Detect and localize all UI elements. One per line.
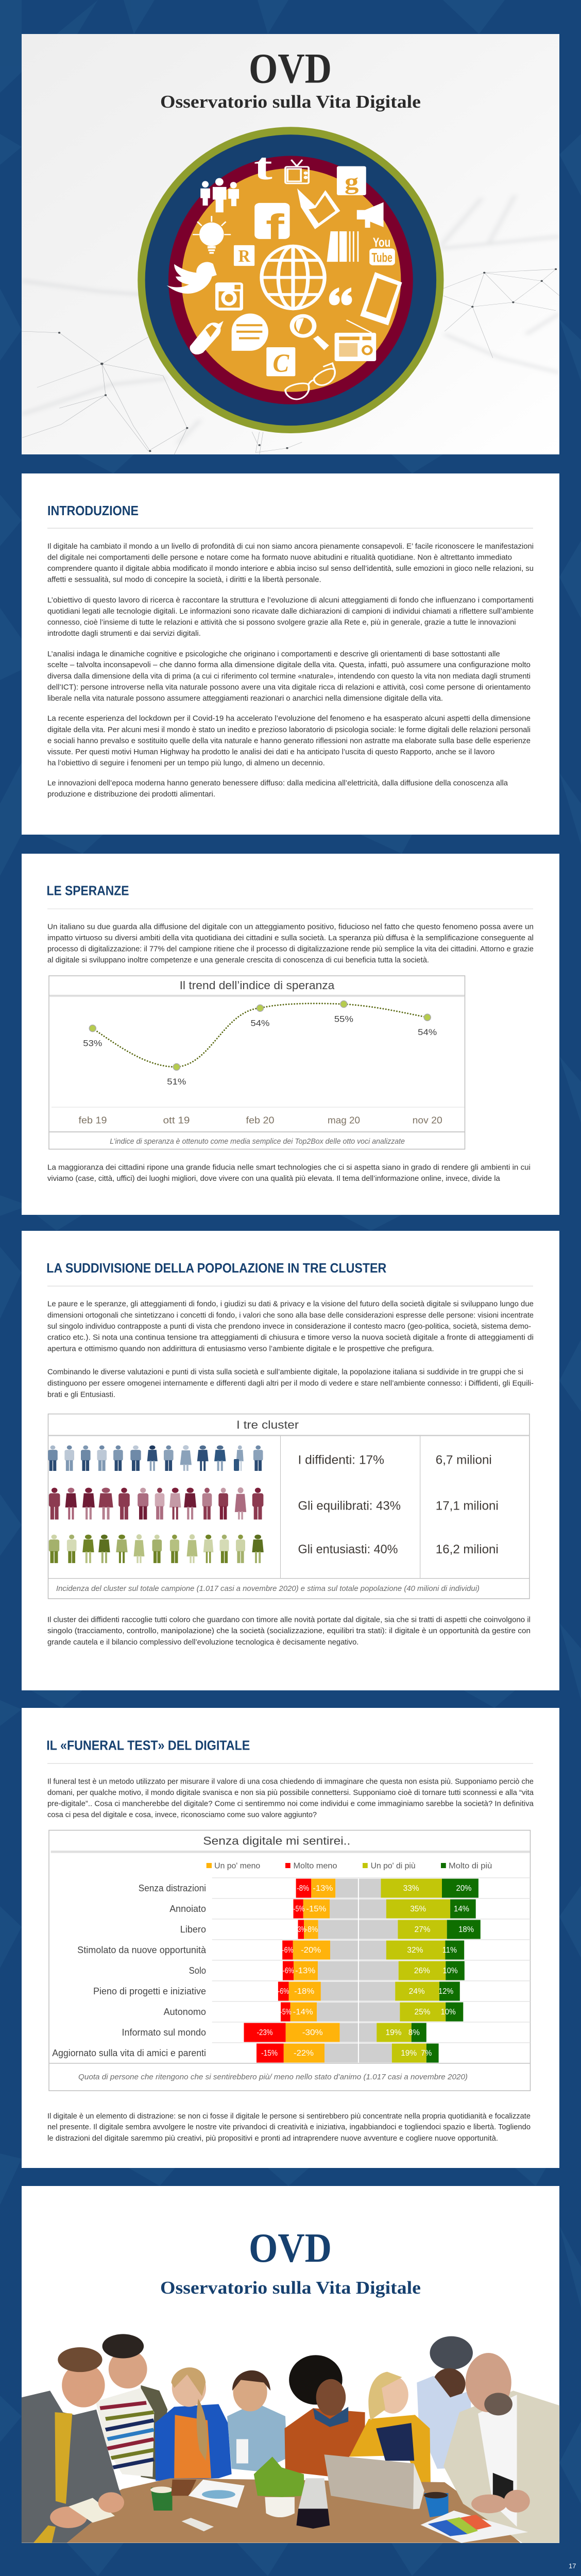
text: introduzione body: e sociali hanno prevalso e sostituito quelle della vita naturale e hanno generato riflessioni non astratte ma elaborate sulla base delle esperienze xyxy=(47,737,531,745)
closing subtitle: Osservatorio sulla Vita Digitale xyxy=(160,2278,421,2298)
pictogram: diffidenti people xyxy=(48,1445,263,1471)
row: aggiornato: -15% xyxy=(261,2049,278,2058)
row: equilibrati: 17,1 milioni xyxy=(436,1499,499,1513)
row: libero xyxy=(180,1920,481,1939)
person: woman in blue cardigan xyxy=(155,2367,232,2481)
text: funeral intro: Il funeral test è un metodo utilizzato per misurare il valore di una cosa chiedendo di immaginare che questa non esista più. Supponiamo perciò che xyxy=(47,1777,534,1786)
x axis labels: nov 20 xyxy=(413,1115,442,1125)
icon: megaphone xyxy=(357,202,384,228)
text: introduzione body: scelte – talvolta inconsapevoli – che danno forma alla dimensione digitale della vita. Questa, infatti, può assumere una configurazione molto xyxy=(47,661,531,669)
icon: c letter: C xyxy=(272,349,289,378)
row: informato sul mondo: 8% xyxy=(408,2028,420,2037)
text: introduzione body: del digitale nei comportamenti delle persone e notare come ha formato nuove abitudini e ritualità quotidiane. Non è altrettanto immediato xyxy=(47,553,512,562)
row: aggiornato: 7% xyxy=(421,2049,432,2058)
row: libero: Libero xyxy=(180,1924,206,1935)
text: introduzione body: affetti e sessualità, sul modo di concepire la società, i diritti e la libertà personale. xyxy=(47,576,321,584)
icon: folder xyxy=(297,189,340,229)
text: cluster intro xyxy=(47,1300,534,1399)
row: senza distrazioni xyxy=(139,1878,479,1898)
icon: tumblr: t xyxy=(254,146,272,188)
icon: people xyxy=(200,178,239,212)
icon: old phone xyxy=(190,321,224,354)
panel: closing xyxy=(22,2186,559,2543)
network background xyxy=(22,195,559,454)
panel: tre cluster xyxy=(22,1231,559,1690)
row: diffidenti: 6,7 milioni xyxy=(436,1453,492,1467)
text: introduzione body: diversa dalla dimensione della vita di prima (a cui ci riferimento col termine «naturale», intendendo con questo la vita non mediata dagli strumenti xyxy=(47,672,531,681)
beaker xyxy=(297,2478,330,2529)
legend: Molto di più xyxy=(449,1862,492,1871)
text: cluster intro: apertura e ottimismo quando non addirittura di entusiasmo verso l’ambiente digitale e le prospettive che prefigura. xyxy=(47,1345,434,1353)
text: introduzione body: Le innovazioni dell’epoca moderna hanno generato benessere diffuso: dalla medicina all’elettricità, dalla diffusione della conoscenza alla xyxy=(47,779,508,787)
row: annoiato: 35% xyxy=(410,1905,426,1913)
icon: facebook: f xyxy=(266,207,285,248)
chart: trend indice di speranza xyxy=(49,976,465,1149)
row: annoiato xyxy=(169,1899,476,1919)
row: annoiato: -5% xyxy=(293,1905,305,1913)
icon: youtube xyxy=(369,235,395,265)
phone on table xyxy=(182,2518,214,2531)
text: introduzione body: quotidiani legati alle tecnologie digitali. Le informazioni sono ricavate dalle dichiarazioni di campioni di individui chiamati a riflettere sull’ambiente xyxy=(47,607,534,616)
row: solo: Solo xyxy=(189,1965,206,1976)
text: cluster intro: distinguono per essere omogenei internamente e differenti dagli altri per il modo di vedere e stare nell’ambiente connesso: i Diffidenti, gli Equili- xyxy=(47,1379,534,1387)
heading: suddivisione: LA SUDDIVISIONE DELLA POPOLAZIONE IN TRE CLUSTER xyxy=(46,1261,386,1276)
text: introduzione body: vissute. Per questi motivi Human Highway ha prodotto le analisi dei dati e ha anticipato l’uscita di questo Rapporto, anche se il lavoro xyxy=(47,748,494,756)
row: senza distrazioni: -8% xyxy=(297,1884,309,1893)
row: pieno di progetti: 24% xyxy=(409,1987,425,1996)
person: man in stripes xyxy=(96,2334,167,2480)
data labels xyxy=(83,1014,437,1087)
text: cluster closing: grande cautela e il bilancio complessivo dell’evoluzione tecnologica è decisamente negativo. xyxy=(47,1638,358,1647)
icon: tv xyxy=(285,160,309,183)
row: informato sul mondo: Informato sul mondo xyxy=(122,2027,206,2038)
mug: blue xyxy=(424,2492,448,2517)
icon: quote xyxy=(329,287,352,305)
text: cluster closing: Il cluster dei diffidenti raccoglie tutti coloro che guardano con timore alle novità portate dal digitale, sia che si tratti di aspetti che coinvolgono il xyxy=(47,1616,531,1624)
text: funeral intro: domani, per qualche motivo, il mondo digitale svanisca e non sia più possibile connettersi. Supponiamo cioè di tornare tutti sconnessi e alla “vita xyxy=(47,1789,534,1797)
x axis labels: feb 19 xyxy=(78,1115,107,1125)
icon: google xyxy=(337,166,366,195)
row: solo: 26% xyxy=(414,1967,430,1975)
text: introduzione body: produzione e distribuzione dei prodotti alimentari. xyxy=(47,790,215,799)
text: funeral intro: cosa ci pesa del digitale e cosa, invece, riconosciamo come suo valore aggiunto? xyxy=(47,1811,317,1819)
row: senza distrazioni: -13% xyxy=(313,1884,333,1893)
row: annoiato: -15% xyxy=(306,1905,327,1913)
icon: lightbulb xyxy=(193,216,231,254)
row: informato sul mondo xyxy=(122,2023,426,2042)
row: entusiasti xyxy=(298,1543,499,1556)
text: introduzione body: digitale della vita. Per alcuni mesi il mondo è stato un inedito e prezioso laboratorio di psicologia sociale: le forme digitali delle relazioni personali xyxy=(47,726,531,734)
closing title: OVD xyxy=(249,2226,332,2271)
pictogram: equilibrati people xyxy=(49,1487,263,1519)
text: introduzione body: Il digitale ha cambiato il mondo a un livello di profondità di cui non siamo ancora pienamente consapevoli. E’ facile riconoscere le manifestazioni xyxy=(47,543,534,551)
icon: books xyxy=(327,231,358,262)
chart: senza digitale mi sentirei xyxy=(49,1830,531,2091)
chart title: Senza digitale mi sentirei.. xyxy=(203,1835,350,1848)
row: diffidenti xyxy=(298,1453,492,1467)
tablet and paper xyxy=(171,2480,245,2508)
text: funeral closing: le distrazioni del digitale saremmo più creativi, più propositivi e pronti ad intraprendere nuove avventure e cogliere nuove opportunità. xyxy=(47,2134,498,2143)
data points xyxy=(89,1001,431,1071)
person: man with cap xyxy=(417,2336,473,2469)
trend line xyxy=(93,1004,428,1067)
row: informato sul mondo: -30% xyxy=(302,2028,323,2037)
text: cluster intro: cratico etc.). Si nota una continua tensione tra atteggiamenti di chiusura e timore verso la nuova società digitale a fronte di atteggiamenti di xyxy=(47,1334,534,1342)
text: speranze intro: al digitale si sviluppano inoltre competenze e una generale crescita di conoscenza di cui beneficia tutta la società. xyxy=(47,956,429,964)
x axis labels: ott 19 xyxy=(163,1115,190,1125)
icon: smartphone xyxy=(360,272,402,326)
chart caption: Quota di persone che ritengono che si sentirebbero più/ meno nello stato d’animo (1.017 casi a novembre 2020) xyxy=(78,2073,468,2081)
legend xyxy=(207,1862,492,1871)
panel: cover xyxy=(22,34,559,454)
row: autonomo xyxy=(164,2002,463,2022)
row: senza distrazioni: 20% xyxy=(456,1884,472,1893)
laptop xyxy=(324,2454,424,2509)
pictogram: entusiasti people xyxy=(49,1534,264,1563)
text: introduzione body: L’obiettivo di questo lavoro di ricerca è raccontare la struttura e l’evoluzione di alcuni atteggiamenti di fondo che influenzano i comportamenti xyxy=(47,597,534,605)
icon: youtube: Tube xyxy=(372,251,392,265)
data labels: 54% xyxy=(418,1028,437,1037)
text: funeral closing: nel presente. Il digitale sembra avvolgere le nostre vite privandoci di creatività e iniziativa, ingabbiandoci e togliendoci spazio e libertà. Togliendo xyxy=(47,2123,531,2131)
chart title: Il trend dell’indice di speranza xyxy=(180,979,335,992)
row: informato sul mondo: 19% xyxy=(385,2028,402,2037)
icon: google: g xyxy=(345,169,358,194)
icon: glasses xyxy=(285,363,335,399)
row: stimolato: Stimolato da nuove opportunità xyxy=(77,1945,207,1955)
person: woman in yellow xyxy=(349,2372,431,2484)
row: libero: 18% xyxy=(458,1925,474,1934)
row: stimolato xyxy=(77,1940,464,1960)
text: cluster intro: sul singolo individuo contrapposte a punti di vista che prendono invece in considerazione il contesto macro (geo-politica, società, sistema demo- xyxy=(47,1323,531,1331)
row: pieno di progetti: -18% xyxy=(294,1987,314,1996)
mug: green xyxy=(150,2486,173,2511)
row: libero: -8% xyxy=(305,1925,318,1934)
text: introduzione body: liberale nella vita naturale possono assumere atteggiamenti reazionari o anarchici nella dimensione digitale della vita. xyxy=(47,694,443,703)
row: annoiato: Annoiato xyxy=(169,1904,206,1914)
emblem: digital media circle xyxy=(138,127,443,433)
row: diffidenti: I diffidenti: 17% xyxy=(298,1453,384,1467)
icon: speech bubble xyxy=(232,314,268,351)
row: entusiasti: Gli entusiasti: 40% xyxy=(298,1543,398,1556)
person: bald man in cream blazer xyxy=(443,2353,559,2543)
data labels: 54% xyxy=(250,1019,270,1028)
plant xyxy=(254,2456,304,2517)
text: introduzione body: introdotte dagli strumenti e dai servizi digitali. xyxy=(47,630,201,638)
row: solo: -6% xyxy=(283,1967,294,1975)
text: funeral closing xyxy=(47,2112,531,2143)
text: funeral intro: pre-digitale”.. Cosa ci mancherebbe del digitale? Come ci sentiremmo noi come individui e come immaginiamo sarebbe la società? In definitiva xyxy=(47,1800,534,1808)
legend: Molto meno xyxy=(294,1862,337,1871)
row: stimolato: -6% xyxy=(282,1946,294,1955)
row: senza distrazioni: 33% xyxy=(403,1884,419,1893)
text: cluster intro: dimensioni ortogonali che sintetizzano i concetti di fondo, i valori che sono alla base delle considerazioni espresse delle persone: visioni incentrate xyxy=(47,1311,534,1319)
text: funeral closing: Il digitale è un elemento di distrazione: se non ci fosse il digitale le persone si sentirebbero più concentrate nella propria quotidianità e focalizzate xyxy=(47,2112,531,2121)
text: speranze intro: Un italiano su due guarda alla diffusione del digitale con un atteggiamento positivo, fiducioso nel fatto che questo fenomeno possa avere un xyxy=(47,923,534,931)
legend: Un po' meno xyxy=(214,1862,260,1871)
icon: facebook xyxy=(254,203,290,248)
heading: introduzione: INTRODUZIONE xyxy=(47,504,139,518)
row: autonomo: Autonomo xyxy=(164,2007,206,2017)
row: informato sul mondo: -23% xyxy=(257,2028,273,2037)
data labels: 55% xyxy=(334,1014,353,1024)
row: pieno di progetti: -6% xyxy=(278,1987,289,1996)
icon: twitter xyxy=(167,262,217,294)
person: man with afro xyxy=(284,2355,365,2477)
text: speranze intro xyxy=(47,923,534,964)
icon: magnifier xyxy=(290,314,329,350)
page number: 17 xyxy=(569,2562,576,2570)
text: speranze closing xyxy=(47,1164,531,1183)
text: introduzione body: dell’ICT): persone introverse nella vita naturale possono avere una vita digitale ricca di relazioni e attività, così come persone di orientamento xyxy=(47,683,531,691)
row: senza distrazioni: Senza distrazioni xyxy=(139,1883,206,1893)
x axis labels: feb 20 xyxy=(246,1115,274,1125)
chart caption: L’indice di speranza è ottenuto come media semplice dei Top2Box delle otto voci analizzate xyxy=(110,1138,405,1146)
row: stimolato: 32% xyxy=(407,1946,423,1955)
row: stimolato: -20% xyxy=(301,1946,321,1955)
row: autonomo: 25% xyxy=(414,2008,431,2016)
row: pieno di progetti: 12% xyxy=(438,1987,453,1996)
row: aggiornato xyxy=(52,2043,439,2063)
row: libero: 27% xyxy=(414,1925,431,1934)
panel: introduzione xyxy=(22,473,559,835)
row: pieno di progetti: Pieno di progetti e iniziative xyxy=(93,1986,206,1996)
row: aggiornato: -22% xyxy=(294,2049,314,2058)
legend: Un po' di più xyxy=(371,1862,416,1871)
row: pieno di progetti xyxy=(93,1981,460,2001)
text: speranze closing: La maggioranza dei cittadini ripone una grande fiducia nelle smart technologies che ci si aspetta siano in grado di rendere gli ambienti in cui xyxy=(47,1164,531,1172)
table xyxy=(37,2478,521,2543)
text: introduzione body: La recente esperienza del lockdown per il Covid-19 ha accelerato l’evoluzione del fenomeno e ha esasperato alcuni aspetti della dimensione xyxy=(47,715,531,723)
row: autonomo: -14% xyxy=(293,2008,313,2016)
text: speranze intro: impatto virtuoso su diversi ambiti della vita quotidiana dei cittadini e sulla società. La speranza più diffusa è la semplificazione conseguente al xyxy=(47,934,534,942)
panel: le speranze xyxy=(22,854,559,1215)
text: speranze closing: viviamo (case, città, uffici) dei luoghi migliori, dove vivere con una qualità più elevata. Il tema dell’informazione online, invece, divide la xyxy=(47,1175,501,1183)
icon: globe xyxy=(262,246,324,309)
data labels: 53% xyxy=(83,1039,102,1048)
text: speranze intro: processo di digitalizzazione: il 77% del campione ritiene che il processo di digitalizzazione rende più semplice la vita dei cittadini. Attorno e grazie xyxy=(47,945,534,953)
text: cluster closing xyxy=(47,1616,531,1647)
text: cluster intro: brati e gli Entusiasti. xyxy=(47,1391,115,1399)
icon: youtube: You xyxy=(373,235,390,250)
text: introduzione body xyxy=(47,543,534,799)
row: autonomo: 10% xyxy=(441,2008,456,2016)
text: introduzione body: comprendere quanto il digitale abbia modificato il mondo interiore e abbia inciso sul senso dell’identità, sulle emozioni in gioco nelle relazioni, su xyxy=(47,565,534,573)
table title: I tre cluster xyxy=(236,1418,299,1431)
row: equilibrati: Gli equilibrati: 43% xyxy=(298,1499,401,1513)
row: libero: -3% xyxy=(296,1925,306,1934)
row: equilibrati xyxy=(298,1499,499,1513)
text: funeral intro xyxy=(47,1777,534,1819)
x axis labels xyxy=(78,1115,442,1125)
row: stimolato: 11% xyxy=(442,1946,457,1955)
row: entusiasti: 16,2 milioni xyxy=(436,1543,499,1556)
table caption: Incidenza del cluster sul totale campione (1.017 casi a novembre 2020) e stima sul totale popolazione (40 milioni di individui) xyxy=(56,1585,480,1593)
cover subtitle: Osservatorio sulla Vita Digitale xyxy=(160,92,421,112)
data labels: 51% xyxy=(167,1077,186,1087)
photo: group of people at table xyxy=(22,2334,559,2543)
icon: reader: R xyxy=(238,247,250,266)
text: introduzione body: connesso, cioè l’insieme di tutte le relazioni e attività che si possono svolgere grazie alla Rete e, più in generale, grazie a tutte le innovazioni xyxy=(47,618,516,626)
row: autonomo: -5% xyxy=(280,2008,292,2016)
person: man in grey blazer xyxy=(22,2347,124,2543)
row: solo: 10% xyxy=(443,1967,458,1975)
text: cluster intro: Combinando le diverse valutazioni e punti di vista sulla società e sull’ambiente digitale, la popolazione italiana si suddivide in tre gruppi che si xyxy=(47,1368,523,1377)
table: i tre cluster xyxy=(48,1414,529,1599)
row: annoiato: 14% xyxy=(454,1905,469,1913)
cover title: OVD xyxy=(249,45,332,92)
row: solo: -13% xyxy=(295,1967,315,1975)
icon: reader xyxy=(234,245,254,266)
heading: le speranze: LE SPERANZE xyxy=(46,884,129,899)
icon: radio xyxy=(335,320,376,361)
person: woman in denim jacket xyxy=(227,2370,287,2471)
panel: funeral test xyxy=(22,1708,559,2168)
icon: instagram xyxy=(215,282,243,311)
x axis labels: mag 20 xyxy=(328,1115,360,1125)
text: introduzione body: ha l’obiettivo di seguire i fenomeni per un tempo più lungo, di almeno un decennio. xyxy=(47,759,325,768)
text: introduzione body: L’analisi indaga le dinamiche cognitive e psicologiche che originano i comportamenti e descrive gli orientamenti di base sottostanti alle xyxy=(47,650,500,658)
text: cluster intro: Le paure e le speranze, gli atteggiamenti di fondo, i giudizi su dati & privacy e la visione del futuro della società digitale si sviluppano lungo due xyxy=(47,1300,534,1309)
heading: funeral test: IL «FUNERAL TEST» DEL DIGITALE xyxy=(46,1739,250,1753)
text: cluster closing: singolo (tracciamento, controllo, manipolazione) che la società (socializzazione, equilibri tra stati): il digitale è un opportunità da gestire con xyxy=(47,1627,531,1635)
report with rainbow chart xyxy=(421,2511,528,2543)
row: aggiornato: 19% xyxy=(401,2049,417,2058)
row: aggiornato: Aggiornato sulla vita di amici e parenti xyxy=(52,2048,206,2058)
row: solo xyxy=(189,1961,465,1980)
